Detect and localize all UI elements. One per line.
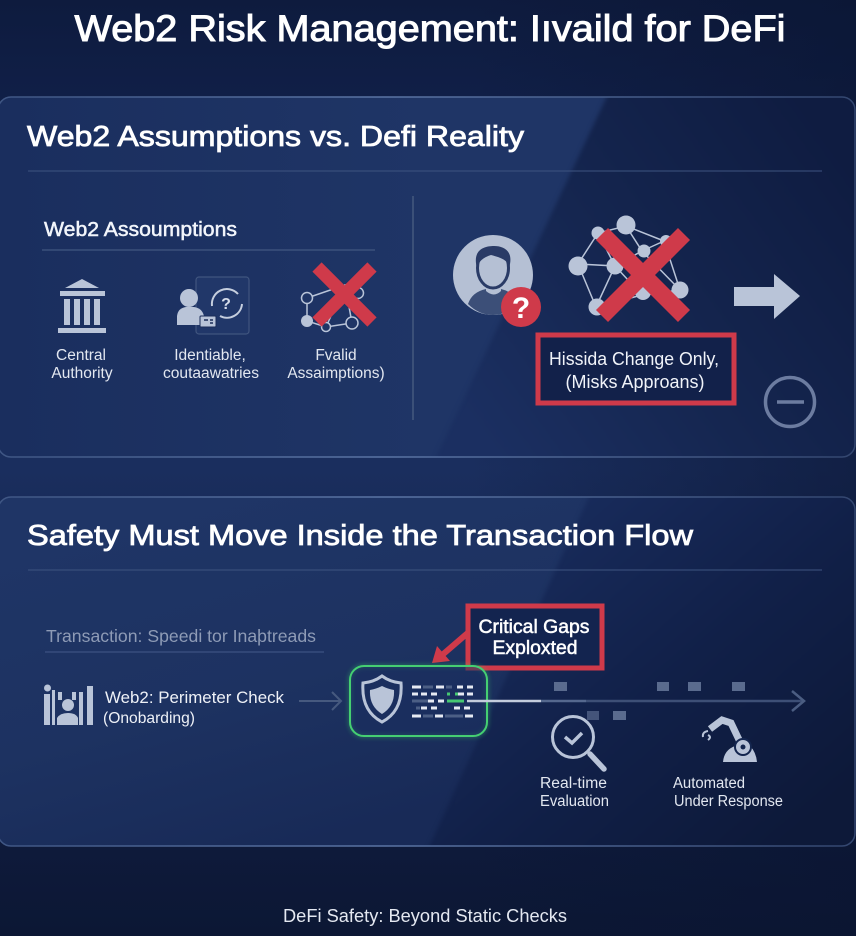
panel heading: Safety Must Move Inside the Transaction Flow bbox=[27, 520, 694, 552]
label: automated response: Under Response bbox=[674, 793, 783, 810]
label: real-time evaluation: Evaluation bbox=[540, 793, 609, 810]
callout: critical gaps exploited: Exploxted bbox=[492, 638, 578, 659]
label: identifiable counterparties: coutaawatries bbox=[163, 365, 259, 382]
transaction block markers bbox=[554, 682, 745, 720]
icon: robotic arm bbox=[703, 720, 757, 762]
code lines bbox=[412, 687, 473, 716]
label: identifiable counterparties: Identiable, bbox=[174, 347, 246, 364]
icon: central authority building bbox=[58, 279, 106, 333]
label: real-time evaluation: Real-time bbox=[540, 775, 607, 792]
label: automated response: Automated bbox=[673, 775, 745, 792]
icon: anonymous user with question mark bbox=[453, 235, 541, 327]
icon: magnifier with check bbox=[552, 716, 604, 769]
icon: perimeter gate bbox=[44, 684, 93, 725]
label: web2 perimeter check: (Onobarding) bbox=[103, 710, 195, 727]
icon: crossed-out network bbox=[301, 267, 372, 332]
callout: hidden change: (Misks Approans) bbox=[566, 372, 704, 392]
arrow: to check box bbox=[299, 692, 341, 710]
icon: shield bbox=[363, 676, 401, 722]
footer: DeFi Safety: Beyond Static Checks bbox=[283, 906, 567, 926]
title: Web2 Risk Management: Iıvaild for DeFi bbox=[74, 8, 786, 49]
arrow: right bbox=[734, 274, 800, 319]
icon: minus circle bbox=[766, 378, 814, 426]
label: central authority: Authority bbox=[51, 365, 113, 382]
callout: hidden change: Hissida Change Only, bbox=[549, 349, 719, 369]
label: invalid assumptions: Assaimptions) bbox=[287, 365, 385, 382]
panel heading: Web2 Assumptions vs. Defi Reality bbox=[27, 121, 525, 153]
callout: critical gaps exploited: Critical Gaps bbox=[478, 617, 590, 638]
callout: hidden change bbox=[538, 335, 734, 403]
subheading: Web2 Assumptions: Web2 Assoumptions bbox=[44, 219, 237, 241]
label: web2 perimeter check: Web2: Perimeter Check bbox=[105, 688, 284, 707]
panel: Web2 assumptions vs DeFi reality bbox=[0, 90, 856, 470]
panel: safety in the transaction flow bbox=[0, 490, 856, 860]
label: invalid assumptions: Fvalid bbox=[315, 347, 357, 364]
icon: crossed-out network graph bbox=[568, 216, 688, 316]
icon: anonymous user with question mark: ? bbox=[512, 292, 530, 325]
green safety check box bbox=[350, 666, 487, 736]
icon: identifiable counterparty bbox=[177, 277, 249, 334]
label: central authority: Central bbox=[56, 347, 106, 364]
subheading: transaction speed: Transaction: Speedi tor Inaþtreads bbox=[46, 626, 316, 646]
icon: identifiable counterparty: ? bbox=[221, 296, 231, 313]
callout: critical gaps exploited bbox=[432, 606, 602, 668]
timeline arrow bbox=[467, 691, 804, 711]
